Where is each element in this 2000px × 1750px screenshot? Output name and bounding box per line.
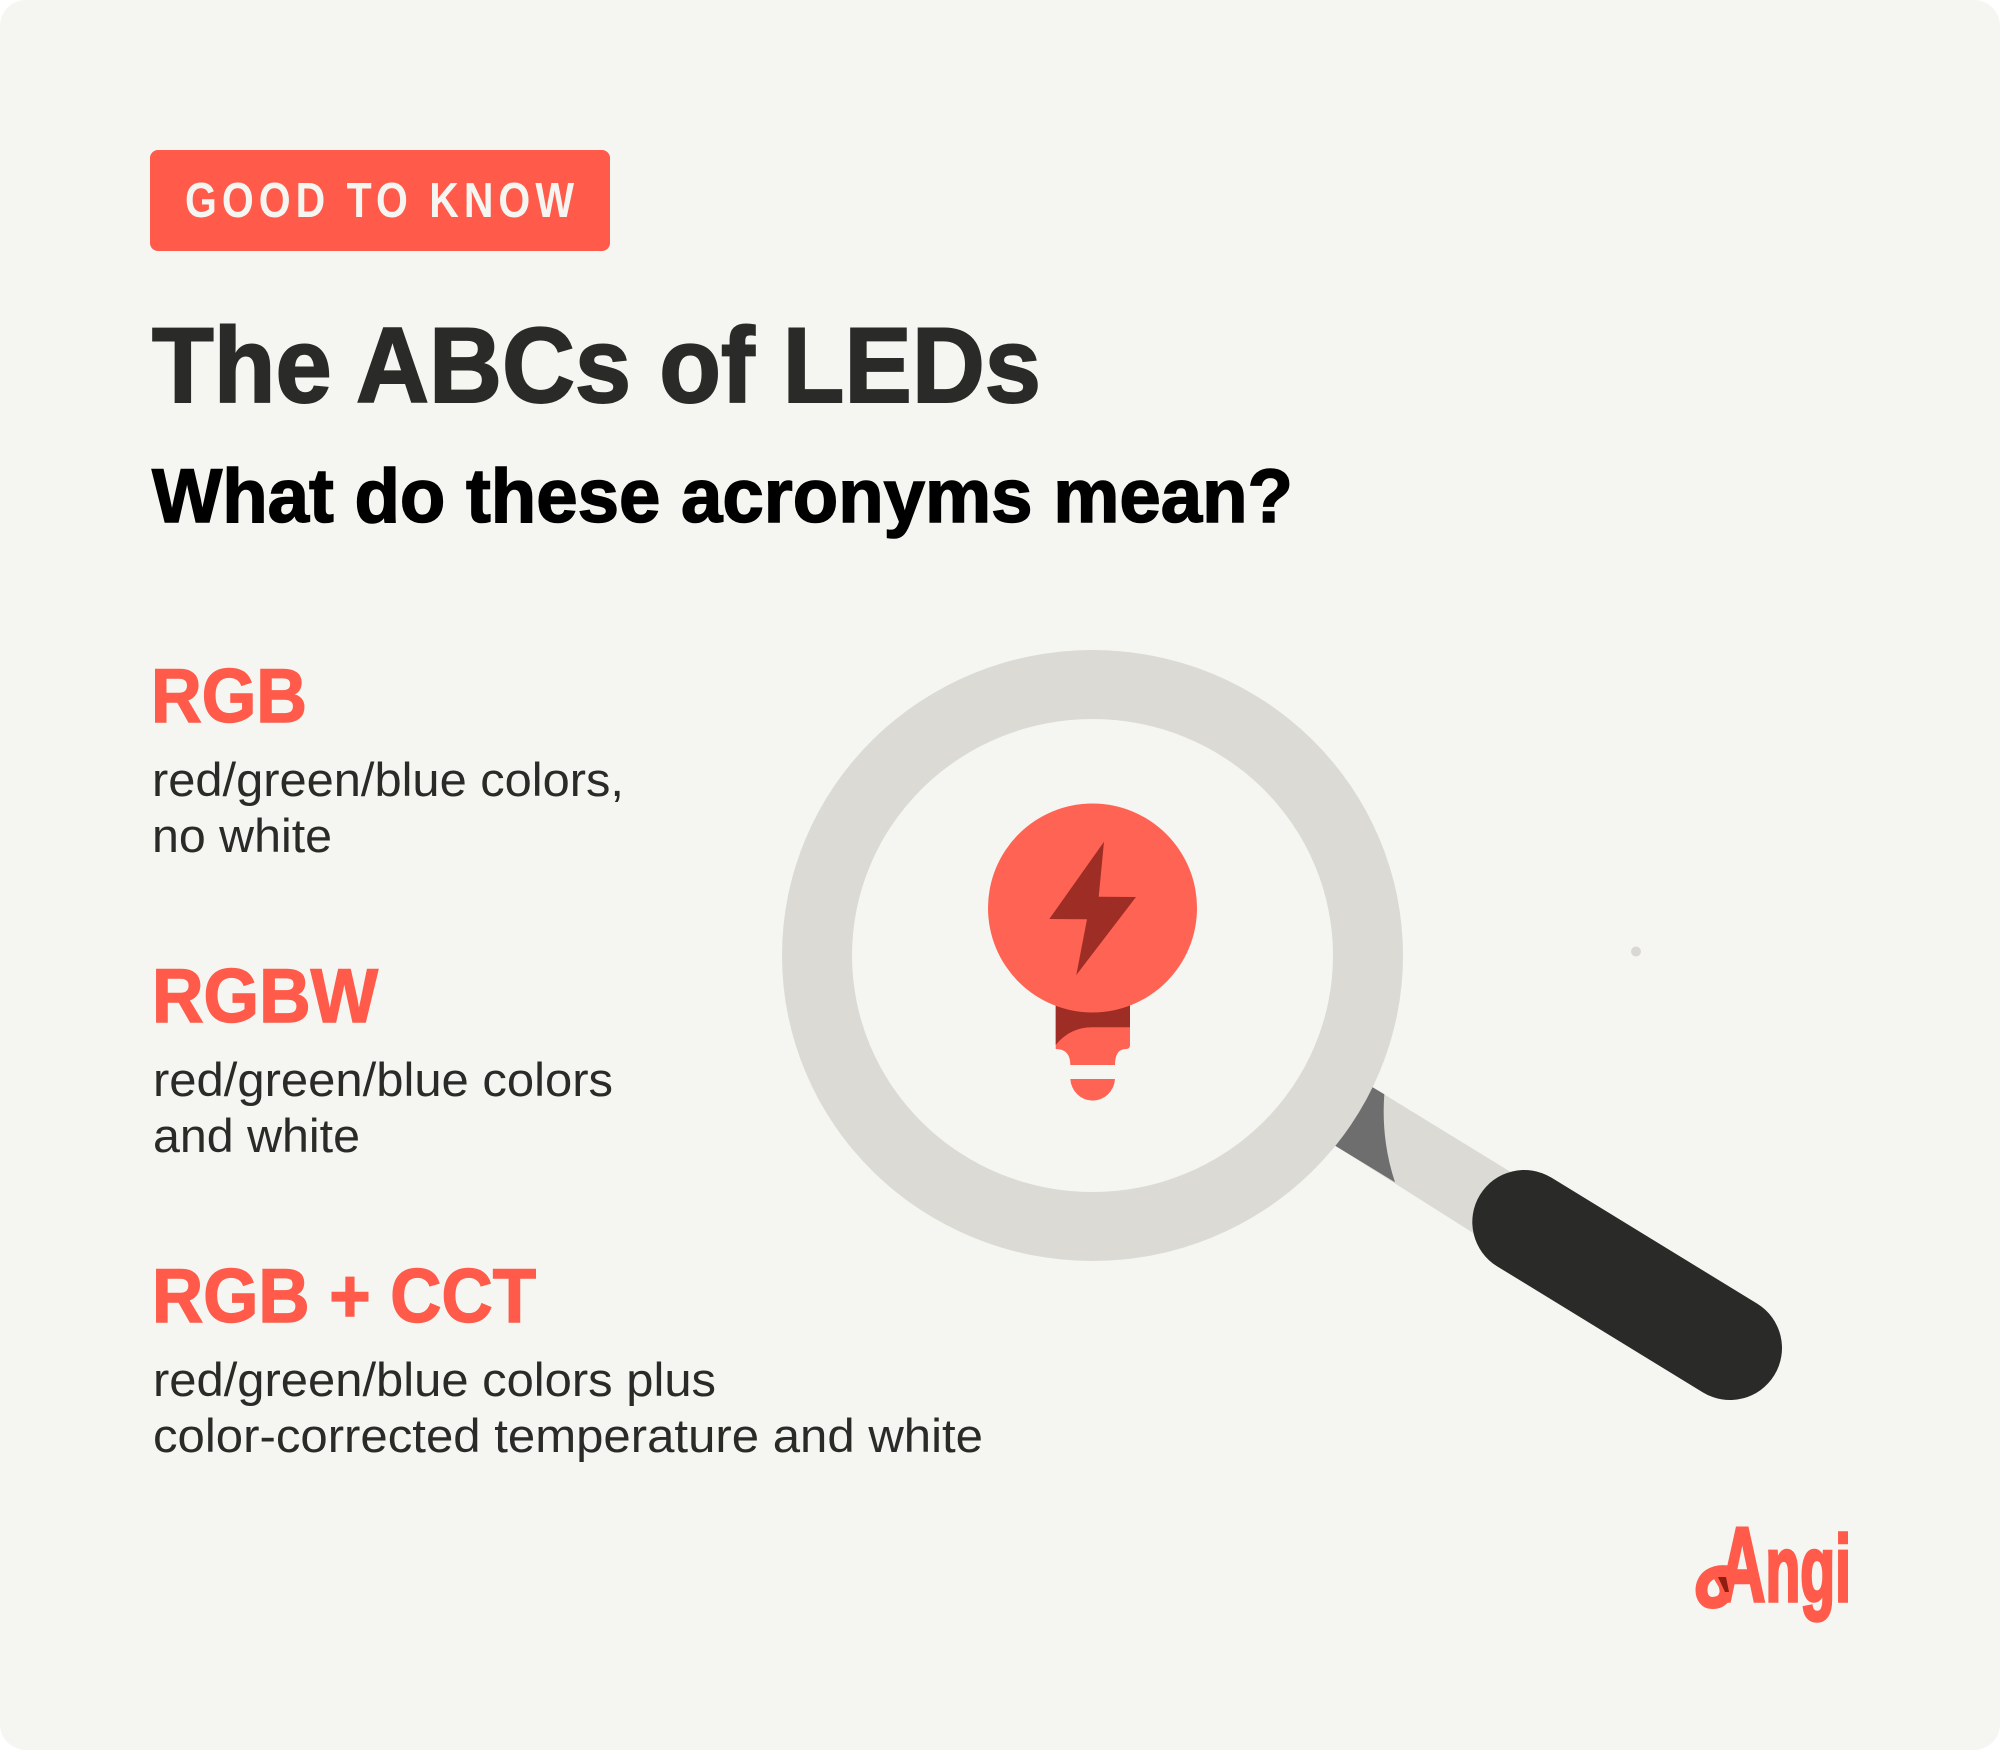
logo loop <box>1702 1571 1732 1603</box>
definition: RGBW <box>152 954 613 1162</box>
magnifier handle <box>1524 1222 1730 1348</box>
definition: RGBW: RGBW <box>152 954 378 1039</box>
lightning bolt <box>1049 842 1136 975</box>
definition: RGB: RGB <box>151 654 307 739</box>
bulb glass <box>988 804 1197 1012</box>
definition: RGB <box>151 654 624 862</box>
icon: light bulb <box>988 804 1197 1101</box>
decorative dot <box>1631 946 1641 956</box>
magnifier ring <box>782 650 1403 1261</box>
definition: RGBW: and white <box>153 1109 360 1162</box>
definition: RGB: no white <box>152 809 332 862</box>
definition: RGB + CCT: RGB + CCT <box>152 1254 536 1339</box>
logo wordmark: Angi <box>1719 1506 1851 1624</box>
subtitle: What do these acronyms mean? <box>152 454 1293 539</box>
badge: good to know: GOOD TO KNOW <box>185 174 579 228</box>
logo loop shadow <box>1718 1577 1729 1592</box>
definition: RGB + CCT: red/green/blue colors plus <box>153 1353 716 1406</box>
definition: RGBW: red/green/blue colors <box>153 1053 613 1106</box>
definition: RGB + CCT: color-corrected temperature and white <box>153 1409 983 1462</box>
bulb tip <box>1070 1079 1115 1101</box>
badge: good to know <box>150 150 610 251</box>
bulb base <box>1056 980 1130 1065</box>
magnifier shaft shadow <box>1330 1084 1395 1182</box>
logo: Angi <box>1702 1506 1851 1624</box>
icon: magnifying glass <box>782 650 1730 1348</box>
bulb base shadow <box>1056 980 1130 1045</box>
definition: RGB: red/green/blue colors, <box>152 753 624 806</box>
magnifier shaft <box>1336 1087 1540 1250</box>
title: The ABCs of LEDs <box>152 305 1041 425</box>
definition: RGB + CCT <box>152 1254 983 1462</box>
